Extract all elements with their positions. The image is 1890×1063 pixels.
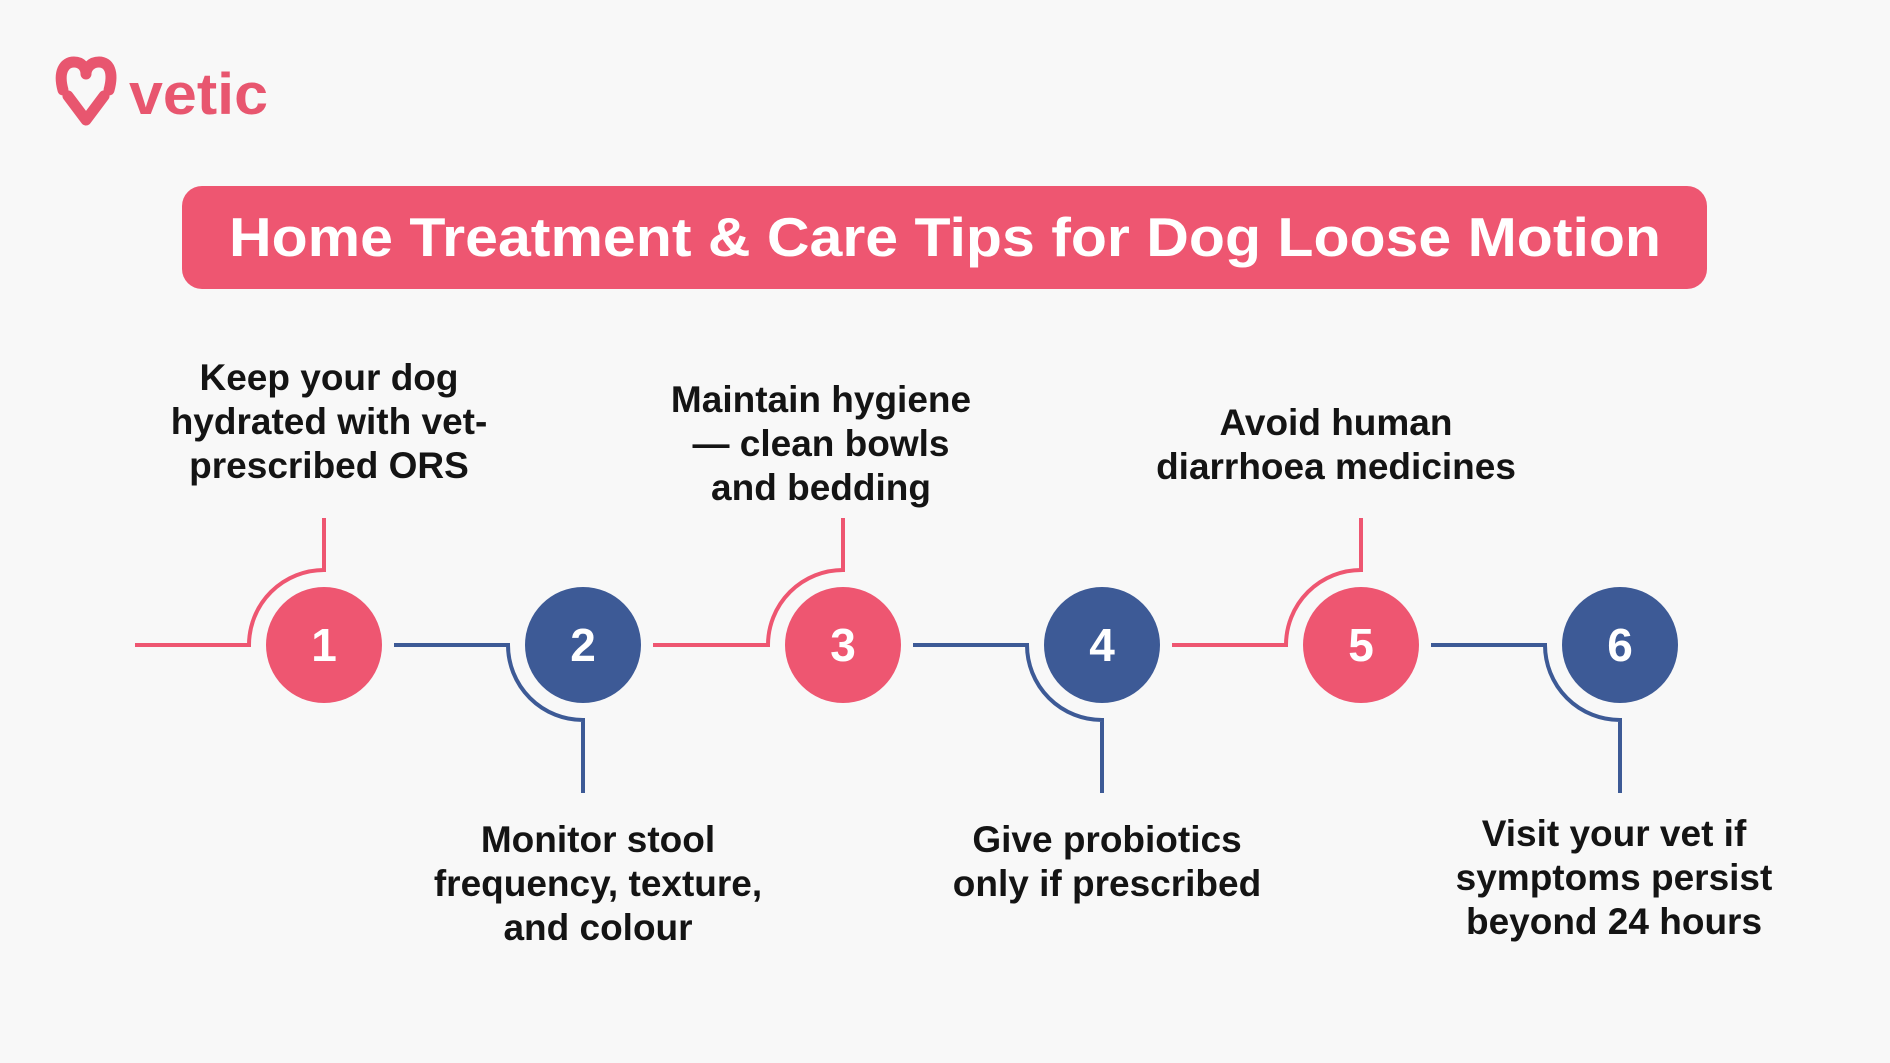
circle 1 <box>266 587 382 703</box>
connector 5 <box>1172 518 1361 645</box>
circle 5 <box>1303 587 1419 703</box>
text: step 4: Give probiotics <box>972 819 1242 860</box>
text: step 2: Monitor stool <box>481 819 715 860</box>
text: step 1: Keep your dog <box>199 357 459 398</box>
logo text: vetic <box>129 62 268 127</box>
circle 3: 3 <box>830 619 856 671</box>
circle 6: 6 <box>1607 619 1633 671</box>
logo <box>61 62 268 127</box>
connector 1 <box>135 518 324 645</box>
text: step 6: symptoms persist <box>1456 857 1772 898</box>
icon: heart V <box>61 62 111 120</box>
text: step 5: diarrhoea medicines <box>1156 446 1516 487</box>
circle 6 <box>1562 587 1678 703</box>
text: step 6: beyond 24 hours <box>1466 901 1762 942</box>
circle 1: 1 <box>311 619 337 671</box>
title banner <box>182 186 1707 289</box>
text: step 1: prescribed ORS <box>189 445 469 486</box>
text: step 1: hydrated with vet- <box>171 401 487 442</box>
text: step 3: Maintain hygiene <box>671 379 971 420</box>
circle 2 <box>525 587 641 703</box>
text: step 5: Avoid human <box>1220 402 1452 443</box>
connector 2 <box>394 645 583 793</box>
text: step 4: only if prescribed <box>953 863 1261 904</box>
connector 4 <box>913 645 1102 793</box>
timeline <box>135 518 1620 793</box>
title banner: Home Treatment & Care Tips for Dog Loose Motion <box>229 206 1661 268</box>
circle 3 <box>785 587 901 703</box>
text: step 2: and colour <box>503 907 693 948</box>
circle 2: 2 <box>570 619 596 671</box>
circle 5: 5 <box>1348 619 1374 671</box>
connector 3 <box>653 518 843 645</box>
text: step 3: — clean bowls <box>692 423 950 464</box>
circle 4 <box>1044 587 1160 703</box>
circle 4: 4 <box>1089 619 1115 671</box>
text: step 2: frequency, texture, <box>434 863 762 904</box>
text: step 6: Visit your vet if <box>1482 813 1747 854</box>
connector 6 <box>1431 645 1620 793</box>
text: step 3: and bedding <box>711 467 931 508</box>
